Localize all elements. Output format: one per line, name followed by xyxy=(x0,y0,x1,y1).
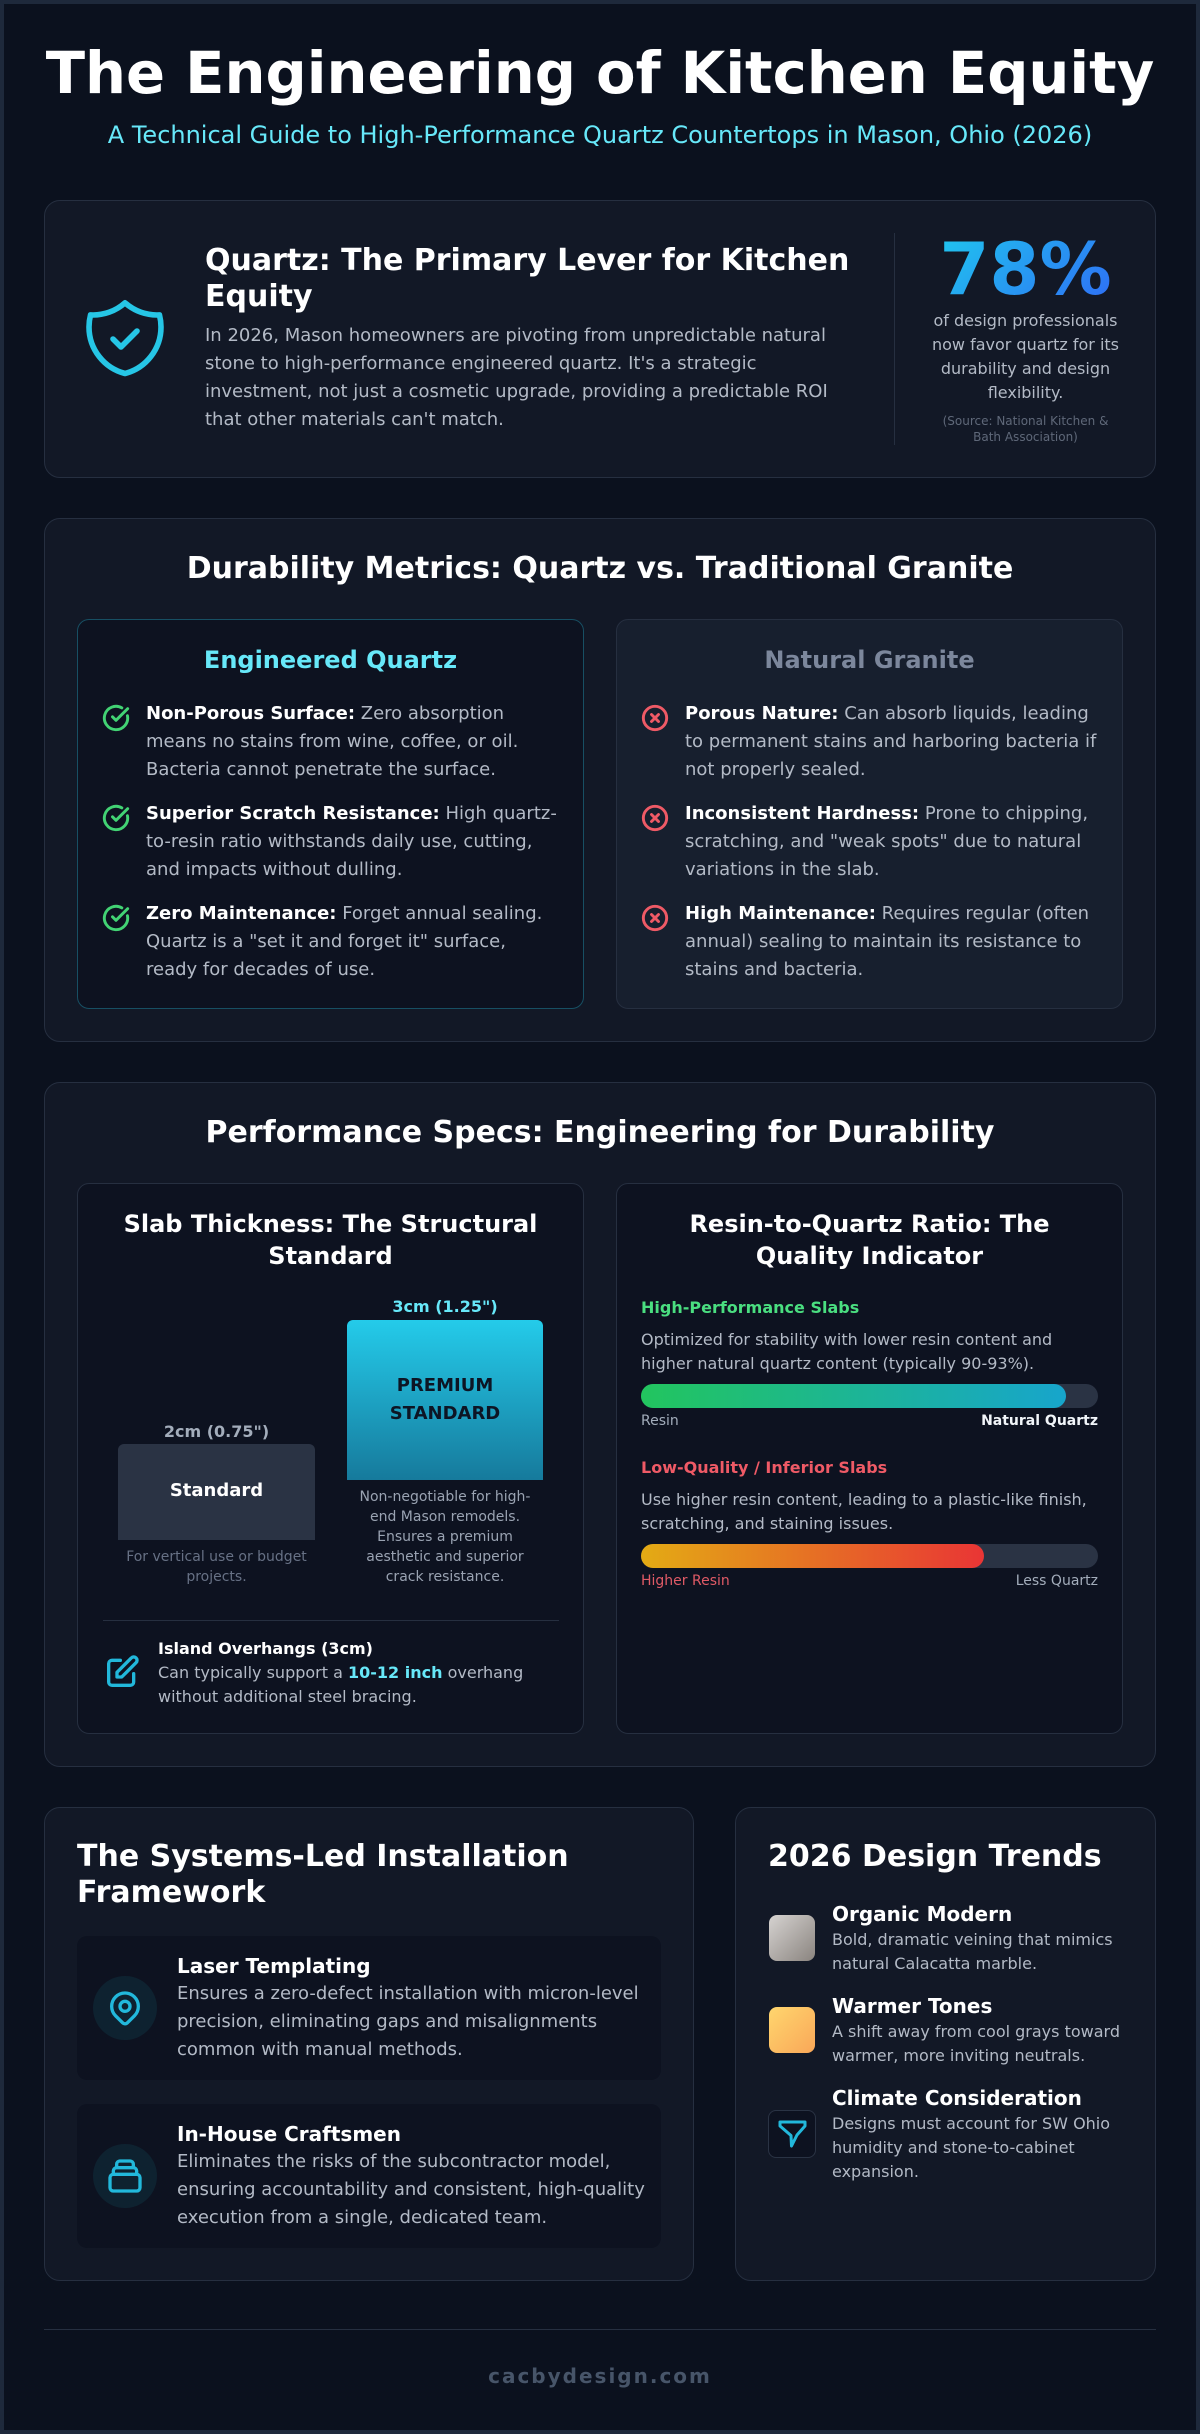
text: warmer, more inviting neutrals. xyxy=(832,2046,1085,2065)
text: to-resin ratio withstands daily use, cutting, xyxy=(146,831,532,852)
label: laser templating: Laser Templating xyxy=(177,1954,371,1978)
bar: premium slab xyxy=(347,1320,543,1480)
heading: engineered quartz: Engineered Quartz xyxy=(204,646,457,674)
text: High Maintenance: Requires regular (often xyxy=(685,903,1089,924)
icon: funnel xyxy=(769,2111,815,2157)
text xyxy=(832,2086,1110,2184)
icon circle: location pin xyxy=(93,1976,157,2040)
text: stat description: durability and design xyxy=(941,359,1110,378)
label: higher resin: Higher Resin xyxy=(641,1573,730,1589)
heading: performance specs: Performance Specs: Engineering for Durability xyxy=(206,1115,994,1150)
icon: shield check xyxy=(86,300,164,376)
text: premium caption: aesthetic and superior xyxy=(366,1549,524,1565)
heading: slab thickness: Standard xyxy=(268,1242,393,1270)
subtitle: A Technical Guide to High-Performance Quartz Countertops in Mason, Ohio (2026) xyxy=(108,121,1092,149)
text: Non-Porous Surface: Zero absorption xyxy=(146,703,504,724)
heading: resin ratio: Resin-to-Quartz Ratio: The xyxy=(689,1210,1050,1238)
icon: x xyxy=(642,804,668,832)
footer: website: cacbydesign.com xyxy=(488,2364,712,2388)
text: annual) sealing to maintain its resistance to xyxy=(685,931,1081,952)
panel: design trends xyxy=(735,1807,1156,2281)
text: premium caption: end Mason remodels. xyxy=(370,1509,520,1525)
title: The Engineering of Kitchen Equity xyxy=(46,40,1154,107)
text: and impacts without dulling. xyxy=(146,859,402,880)
label: 3cm: 3cm (1.25") xyxy=(392,1297,498,1316)
text: Porous Nature: Can absorb liquids, leading xyxy=(685,703,1089,724)
text: means no stains from wine, coffee, or oil. xyxy=(146,731,518,752)
text: not properly sealed. xyxy=(685,759,866,780)
item: zero maintenance xyxy=(102,903,542,980)
swatch: funnel icon xyxy=(768,2110,816,2158)
item: non-porous xyxy=(102,703,518,780)
swatch: warm xyxy=(769,2007,815,2053)
text: Superior Scratch Resistance: High quartz- xyxy=(146,803,557,824)
text xyxy=(146,803,557,880)
panel: durability metrics xyxy=(44,518,1156,1042)
icon: check xyxy=(102,704,130,732)
bar: premium slab: STANDARD xyxy=(390,1403,500,1424)
text: to permanent stains and harboring bacteria if xyxy=(685,731,1096,752)
text: in-house craftsmen: ensuring accountability and consistent, high-quality xyxy=(177,2179,645,2200)
text: intro paragraph xyxy=(205,325,828,430)
text: standard caption: projects. xyxy=(186,1569,247,1585)
text: high performance xyxy=(641,1330,1052,1373)
text: high performance: Optimized for stability with lower resin content and xyxy=(641,1330,1052,1349)
stat: 78 percent: 78% xyxy=(939,227,1112,311)
text: Inconsistent Hardness: Prone to chipping, xyxy=(685,803,1088,824)
text: Designs must account for SW Ohio xyxy=(832,2114,1110,2133)
text: ready for decades of use. xyxy=(146,959,375,980)
text xyxy=(832,1994,1120,2068)
text: premium caption: Non-negotiable for high- xyxy=(360,1489,530,1505)
text: stat description: of design professionals xyxy=(934,311,1117,330)
text: laser templating: precision, eliminating gaps and misalignments xyxy=(177,2011,597,2032)
step: in-house craftsmen xyxy=(77,2104,661,2248)
label: resin: Resin xyxy=(641,1413,679,1429)
text xyxy=(685,803,1088,880)
footer divider xyxy=(44,2329,1156,2330)
panel: natural granite xyxy=(616,619,1123,1009)
swatch: marble xyxy=(769,1915,815,1961)
text: premium caption xyxy=(360,1489,530,1585)
panel: slab thickness xyxy=(77,1183,584,1734)
text: standard caption: For vertical use or budget xyxy=(126,1549,307,1565)
label: 2cm: 2cm (0.75") xyxy=(164,1422,269,1441)
text: Climate Consideration xyxy=(832,2086,1082,2110)
text: stat description xyxy=(932,311,1119,402)
icon: pin xyxy=(110,1991,140,2026)
text: natural Calacatta marble. xyxy=(832,1954,1037,1973)
text: premium caption: Ensures a premium xyxy=(377,1529,513,1545)
label: natural quartz: Natural Quartz xyxy=(981,1413,1098,1429)
heading: design trends: 2026 Design Trends xyxy=(768,1839,1102,1874)
text: island overhangs: Island Overhangs (3cm) xyxy=(158,1639,373,1658)
text: intro paragraph: investment, not just a cosmetic upgrade, providing a predictable ROI xyxy=(205,381,828,402)
text: laser templating xyxy=(177,1983,639,2060)
label: less quartz: Less Quartz xyxy=(1016,1573,1098,1589)
text: Organic Modern xyxy=(832,1902,1012,1926)
bar: standard slab xyxy=(118,1444,315,1540)
icon: x xyxy=(642,904,668,932)
panel: resin ratio xyxy=(616,1183,1123,1734)
panel: installation framework xyxy=(44,1807,694,2281)
panel: engineered quartz xyxy=(77,619,584,1009)
divider xyxy=(103,1620,559,1621)
text: stat description: flexibility. xyxy=(988,383,1063,402)
text: low quality xyxy=(641,1490,1087,1533)
text: in-house craftsmen xyxy=(177,2151,645,2228)
text xyxy=(146,903,542,980)
text: intro paragraph: In 2026, Mason homeowners are pivoting from unpredictable natural xyxy=(205,325,826,346)
text xyxy=(832,1902,1113,1973)
text: laser templating: common with manual methods. xyxy=(177,2039,463,2060)
heading: durability: Durability Metrics: Quartz vs. Traditional Granite xyxy=(187,551,1013,586)
text: island overhangs xyxy=(158,1639,523,1706)
text: low quality: scratching, and staining issues. xyxy=(641,1514,893,1533)
text: island overhangs: Can typically support a 10-12 inch overhang xyxy=(158,1663,523,1682)
text: low quality: Use higher resin content, leading to a plastic-like finish, xyxy=(641,1490,1087,1509)
text: expansion. xyxy=(832,2162,919,2181)
text: Bacteria cannot penetrate the surface. xyxy=(146,759,496,780)
heading: installation framework: The Systems-Led Installation xyxy=(77,1839,569,1874)
icon: stack xyxy=(108,2159,142,2193)
heading: installation framework xyxy=(77,1839,569,1910)
item: scratch resistance xyxy=(102,803,557,880)
label: in-house craftsmen: In-House Craftsmen xyxy=(177,2122,401,2146)
heading: primary lever xyxy=(205,243,849,314)
text: stains and bacteria. xyxy=(685,959,863,980)
text: Bold, dramatic veining that mimics xyxy=(832,1930,1113,1949)
bar: low quality ratio xyxy=(641,1544,1098,1568)
icon: check xyxy=(102,804,130,832)
text: scratching, and "weak spots" due to natural xyxy=(685,831,1081,852)
heading: primary lever: Quartz: The Primary Lever for Kitchen xyxy=(205,243,849,278)
icon: pencil xyxy=(107,1655,139,1687)
text: source xyxy=(943,414,1108,444)
trend: warmer tones xyxy=(769,1994,1120,2065)
heading: resin ratio: Quality Indicator xyxy=(756,1242,983,1270)
heading: resin ratio xyxy=(689,1210,1050,1270)
heading: primary lever: Equity xyxy=(205,279,313,314)
heading: slab thickness: Slab Thickness: The Structural xyxy=(124,1210,537,1238)
item: porous xyxy=(642,703,1097,780)
text xyxy=(146,703,518,780)
divider xyxy=(894,233,895,445)
heading: installation framework: Framework xyxy=(77,1875,265,1910)
icon: x xyxy=(642,704,668,732)
label: high performance: High-Performance Slabs xyxy=(641,1298,859,1317)
text: in-house craftsmen: execution from a single, dedicated team. xyxy=(177,2207,547,2228)
text xyxy=(685,703,1097,780)
step: laser templating xyxy=(77,1936,661,2080)
item: high maintenance xyxy=(642,903,1089,980)
text: Zero Maintenance: Forget annual sealing. xyxy=(146,903,542,924)
bar: standard slab: Standard xyxy=(170,1480,263,1501)
text: humidity and stone-to-cabinet xyxy=(832,2138,1075,2157)
text: Warmer Tones xyxy=(832,1994,992,2018)
panel: performance specs xyxy=(44,1082,1156,1767)
text: stat description: now favor quartz for its xyxy=(932,335,1119,354)
text: Quartz is a "set it and forget it" surface, xyxy=(146,931,506,952)
text: intro paragraph: stone to high-performance engineered quartz. It's a strategic xyxy=(205,353,757,374)
text: standard caption xyxy=(126,1549,307,1585)
text: source: (Source: National Kitchen & xyxy=(943,414,1108,428)
icon: check xyxy=(102,904,130,932)
bar: high performance ratio xyxy=(641,1384,1098,1408)
trend: organic modern xyxy=(769,1902,1113,1973)
text xyxy=(685,903,1089,980)
label: low quality: Low-Quality / Inferior Slabs xyxy=(641,1458,887,1477)
heading: natural granite: Natural Granite xyxy=(764,646,975,674)
text: high performance: higher natural quartz content (typically 90-93%). xyxy=(641,1354,1034,1373)
text: variations in the slab. xyxy=(685,859,880,880)
text: premium caption: crack resistance. xyxy=(386,1569,504,1585)
text: laser templating: Ensures a zero-defect installation with micron-level xyxy=(177,1983,639,2004)
icon circle: collection xyxy=(93,2144,157,2208)
heading: slab thickness xyxy=(124,1210,537,1270)
text: in-house craftsmen: Eliminates the risks of the subcontractor model, xyxy=(177,2151,610,2172)
text: intro paragraph: that other materials can't match. xyxy=(205,409,504,430)
panel: quartz intro xyxy=(44,200,1156,478)
bar: premium slab: PREMIUM xyxy=(397,1375,493,1396)
text: A shift away from cool grays toward xyxy=(832,2022,1120,2041)
trend: climate consideration xyxy=(768,2086,1148,2194)
item: hardness xyxy=(642,803,1088,880)
text: source: Bath Association) xyxy=(973,430,1078,444)
text: island overhangs: without additional steel bracing. xyxy=(158,1687,417,1706)
